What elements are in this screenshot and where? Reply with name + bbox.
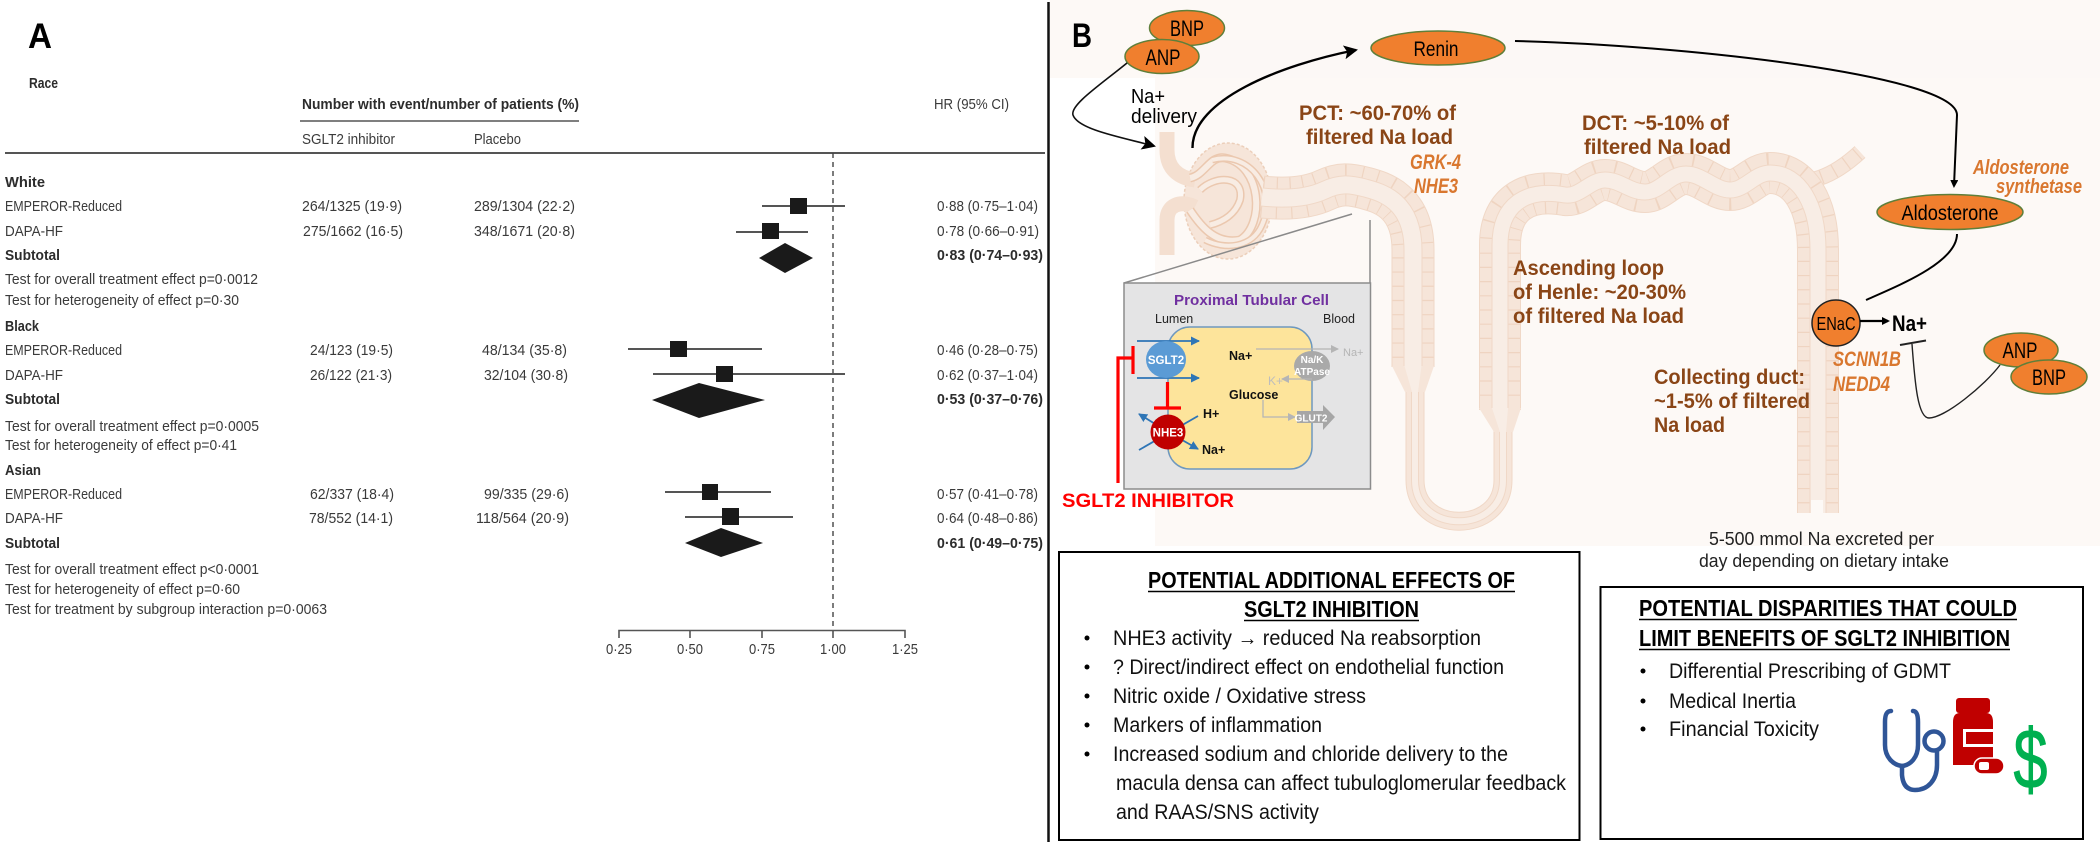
table header: Race [29, 76, 58, 92]
cell ion labels [1202, 349, 1278, 457]
subgroup: White: White [5, 175, 45, 191]
bullet list: macula densa can affect tubuloglomerular feedback [1116, 772, 1566, 795]
panel letter A: A [28, 17, 52, 56]
subgroup: Black: 0·62 (0·37–1·04) [937, 367, 1038, 384]
subgroup: White: 348/1671 (20·8) [474, 223, 575, 240]
bullet list: Increased sodium and chloride delivery to the [1113, 743, 1508, 766]
x axis: 1·25 [892, 641, 918, 658]
faded Na/K ATPase and GLUT2: GLUT2 [1295, 414, 1328, 424]
bullet list: Markers of inflammation [1113, 714, 1322, 737]
cell ion labels: Na+ [1229, 349, 1252, 363]
NHE3 transporter: NHE3 [1153, 428, 1183, 440]
label: collecting duct [1654, 366, 1810, 437]
table header: HR (95% CI) [934, 96, 1009, 113]
subgroup: Asian: 99/335 (29·6) [484, 486, 569, 503]
panel: potential additional effects [1059, 552, 1580, 840]
faded Na/K ATPase and GLUT2: Na+ [1343, 347, 1364, 359]
faded Na/K ATPase and GLUT2: Na/K [1301, 355, 1324, 366]
bullet list: Medical Inertia [1669, 690, 1796, 713]
heading: LIMIT BENEFITS OF SGLT2 INHIBITION [1639, 625, 2010, 651]
NHE3 transporter [1139, 414, 1198, 450]
label: Na+ delivery: delivery [1131, 106, 1197, 128]
SGLT2 transporter: SGLT2 [1148, 355, 1184, 367]
table header: SGLT2 inhibitor [302, 131, 395, 148]
subgroup: Asian: 0·61 (0·49–0·75) [937, 536, 1043, 552]
genes: GRK-4 NHE3: GRK-4 [1410, 151, 1461, 174]
subgroup: White: 0·83 (0·74–0·93) [937, 248, 1043, 264]
x axis: 0·25 [606, 641, 632, 658]
label: collecting duct: ~1-5% of filtered [1654, 390, 1810, 413]
label: DCT: DCT: ~5-10% of [1582, 112, 1730, 135]
x axis [606, 630, 918, 658]
hormone: BNP and ANP top: BNP [1170, 16, 1204, 41]
subgroup: White: 0·88 (0·75–1·04) [937, 198, 1038, 215]
hormone: Aldosterone [1877, 194, 2023, 230]
label: collecting duct: Collecting duct: [1654, 366, 1805, 389]
faded Na/K ATPase and GLUT2 [1256, 347, 1364, 430]
bullet list [1084, 627, 1566, 824]
bullet list: Differential Prescribing of GDMT [1669, 660, 1951, 683]
faded Na/K ATPase and GLUT2: K+ [1268, 374, 1283, 388]
hormone: Aldosterone: Aldosterone [1902, 202, 1998, 225]
table header: Number with event/number of patients (%) [302, 97, 579, 113]
label: SGLT2 inhibitor: SGLT2 INHIBITOR [1062, 491, 1234, 512]
subgroup: White: EMPEROR-Reduced [5, 198, 122, 215]
subgroup: White: Subtotal [5, 248, 60, 264]
hormone: ANP and BNP lower: BNP [2032, 365, 2066, 390]
bullet list: Nitric oxide / Oxidative stress [1113, 685, 1366, 708]
cell body [1168, 327, 1312, 469]
callout lines from tubule to cell [1124, 214, 1370, 283]
subgroup: White: DAPA-HF [5, 223, 63, 240]
table header [5, 76, 1045, 153]
subgroup: White [5, 175, 1043, 309]
heading: SGLT2 INHIBITION [1244, 596, 1419, 622]
bullet list: Financial Toxicity [1669, 718, 1819, 741]
genes: GRK-4 NHE3: NHE3 [1414, 175, 1458, 198]
icon: stethoscope [1885, 711, 1944, 790]
label: PCT: PCT: ~60-70% of [1299, 102, 1457, 125]
hormone: ANP and BNP lower [1984, 333, 2087, 394]
heading [1639, 595, 2017, 651]
icon: medicine bottle [1953, 698, 2004, 774]
label: ascending loop: of filtered Na load [1513, 305, 1684, 328]
subgroup: Asian: Asian [5, 463, 41, 479]
subgroup: Black: Subtotal [5, 392, 60, 408]
subgroup: Black [5, 319, 1043, 454]
genes: SCNN1B NEDD4 [1833, 348, 1901, 396]
subgroup: White: Test for overall treatment effect p=0·0012 [5, 271, 258, 288]
subgroup: White: 289/1304 (22·2) [474, 198, 575, 215]
table header: Placebo [474, 131, 521, 148]
ENaC channel [1812, 300, 1860, 346]
proximal tubule and descending limb [1262, 185, 1434, 392]
subgroup: Asian: Subtotal [5, 536, 60, 552]
subgroup: White: 264/1325 (19·9) [302, 198, 402, 215]
subgroup: Asian: DAPA-HF [5, 510, 63, 527]
hormone: BNP and ANP top [1125, 10, 1224, 74]
subgroup: Asian: Test for heterogeneity of effect p=0·60 [5, 581, 240, 598]
genes: SCNN1B NEDD4: NEDD4 [1833, 373, 1890, 396]
subgroup: Black: Black [5, 319, 40, 335]
subgroup: Asian: Test for treatment by subgroup interaction p=0·0063 [5, 601, 327, 618]
x axis: 1·00 [820, 641, 846, 658]
heading: POTENTIAL DISPARITIES THAT COULD [1639, 595, 2017, 621]
subgroup: Asian: 0·57 (0·41–0·78) [937, 486, 1038, 503]
subgroup: Black: 26/122 (21·3) [310, 367, 392, 384]
subgroup: White: 0·78 (0·66–0·91) [937, 223, 1039, 240]
genes: Aldosterone synthetase: synthetase [1996, 176, 2082, 198]
label: ascending loop: of Henle: ~20-30% [1513, 281, 1686, 304]
genes: Aldosterone synthetase: Aldosterone [1972, 157, 2069, 179]
hormone: Renin [1371, 31, 1505, 65]
subgroup: Black: 32/104 (30·8) [484, 367, 568, 384]
cell ion labels: Na+ [1202, 443, 1225, 457]
label: collecting duct: Na load [1654, 414, 1725, 437]
heading: POTENTIAL ADDITIONAL EFFECTS OF [1148, 567, 1515, 593]
hormone: ANP and BNP lower: ANP [2002, 338, 2038, 363]
subgroup: Asian: 62/337 (18·4) [310, 486, 394, 503]
label: DCT: filtered Na load [1584, 136, 1731, 159]
cell ion labels: H+ [1203, 407, 1219, 421]
subgroup: Black: Test for heterogeneity of effect p=0·41 [5, 437, 237, 454]
inhibition lines: SGLT2 inhibitor [1118, 346, 1181, 483]
cell title: Proximal Tubular Cell [1174, 292, 1329, 309]
faded Na/K ATPase and GLUT2: ATPase [1294, 367, 1330, 378]
loop of Henle thin segment [1415, 385, 1503, 521]
hormone: Renin: Renin [1414, 38, 1458, 61]
label: ascending loop: Ascending loop [1513, 257, 1664, 280]
panel letter B: B [1072, 17, 1092, 55]
subgroup: White: 275/1662 (16·5) [303, 223, 403, 240]
panel: potential disparities [1600, 587, 2083, 839]
bullet list: and RAAS/SNS activity [1116, 801, 1319, 824]
label: Na+: Na+ [1892, 311, 1927, 336]
subgroup: Black: 0·53 (0·37–0·76) [937, 392, 1043, 408]
subgroup: Black: 24/123 (19·5) [310, 342, 393, 359]
inhibition line: ANP/BNP to Na+ [1900, 340, 2000, 418]
genes: GRK-4 NHE3 [1410, 151, 1461, 198]
arrow: Renin to Aldosterone [1515, 41, 1957, 186]
genes: Aldosterone synthetase [1972, 157, 2082, 198]
panel B: kidney background [1050, 0, 2100, 546]
panel: proximal tubular cell [1124, 283, 1370, 489]
label: ascending loop [1513, 257, 1686, 328]
note: sodium excreted: day depending on dietary intake [1699, 551, 1949, 571]
heading [1148, 567, 1515, 622]
bullet list: ? Direct/indirect effect on endothelial function [1113, 656, 1504, 679]
subgroup: Asian: EMPEROR-Reduced [5, 486, 122, 503]
x axis: 0·50 [677, 641, 703, 658]
icon: dollar sign: $ [2014, 712, 2048, 806]
ascending limb, distal tubule and collecting duct [1479, 152, 1860, 514]
lumen and blood labels: Blood [1323, 312, 1355, 326]
lumen and blood labels: Lumen [1155, 312, 1193, 326]
line: Aldosterone to ENaC [1866, 234, 1957, 300]
subgroup: Asian: 0·64 (0·48–0·86) [937, 510, 1038, 527]
subgroup: Black: EMPEROR-Reduced [5, 342, 122, 359]
note: sodium excreted: 5-500 mmol Na excreted per [1709, 529, 1934, 549]
glomerulus and coils [1167, 132, 1272, 259]
subgroup: Black: Test for overall treatment effect p=0·0005 [5, 418, 259, 435]
SGLT2 transporter [1137, 341, 1199, 378]
bullet list [1640, 660, 1951, 741]
label: PCT [1299, 102, 1457, 149]
label: PCT: filtered Na load [1306, 126, 1453, 149]
label: Na+ delivery: Na+ [1131, 86, 1165, 108]
arrow: tubule to Renin [1192, 50, 1356, 148]
x axis: 0·75 [749, 641, 775, 658]
subgroup: Black: 48/134 (35·8) [482, 342, 567, 359]
panel divider [1047, 2, 1050, 842]
arrow: ANP to tubule [1073, 63, 1154, 146]
cell ion labels: Glucose [1229, 388, 1278, 402]
subgroup: Asian [5, 463, 1043, 618]
subgroup: Asian: 78/552 (14·1) [309, 510, 393, 527]
panel A: forest plot [5, 17, 1045, 658]
label: DCT [1582, 112, 1731, 159]
subgroup: Asian: 118/564 (20·9) [476, 510, 569, 527]
hormone: BNP and ANP top: ANP [1146, 45, 1180, 70]
bullet list: NHE3 activity → reduced Na reabsorption [1113, 627, 1481, 650]
subgroup: Black: DAPA-HF [5, 367, 63, 384]
genes: SCNN1B NEDD4: SCNN1B [1833, 348, 1901, 371]
subgroup: Black: 0·46 (0·28–0·75) [937, 342, 1038, 359]
arrow: ENaC to Na+ [1860, 320, 1888, 322]
lumen and blood labels [1155, 312, 1355, 326]
ENaC channel: ENaC [1816, 314, 1856, 334]
subgroup: Asian: Test for overall treatment effect p<0·0001 [5, 561, 259, 578]
label: Na+ delivery [1131, 86, 1197, 128]
note: sodium excreted [1699, 529, 1949, 571]
subgroup: White: Test for heterogeneity of effect p=0·30 [5, 292, 239, 309]
nephron illustration [1167, 132, 1860, 521]
forest plot graphic [628, 153, 845, 630]
